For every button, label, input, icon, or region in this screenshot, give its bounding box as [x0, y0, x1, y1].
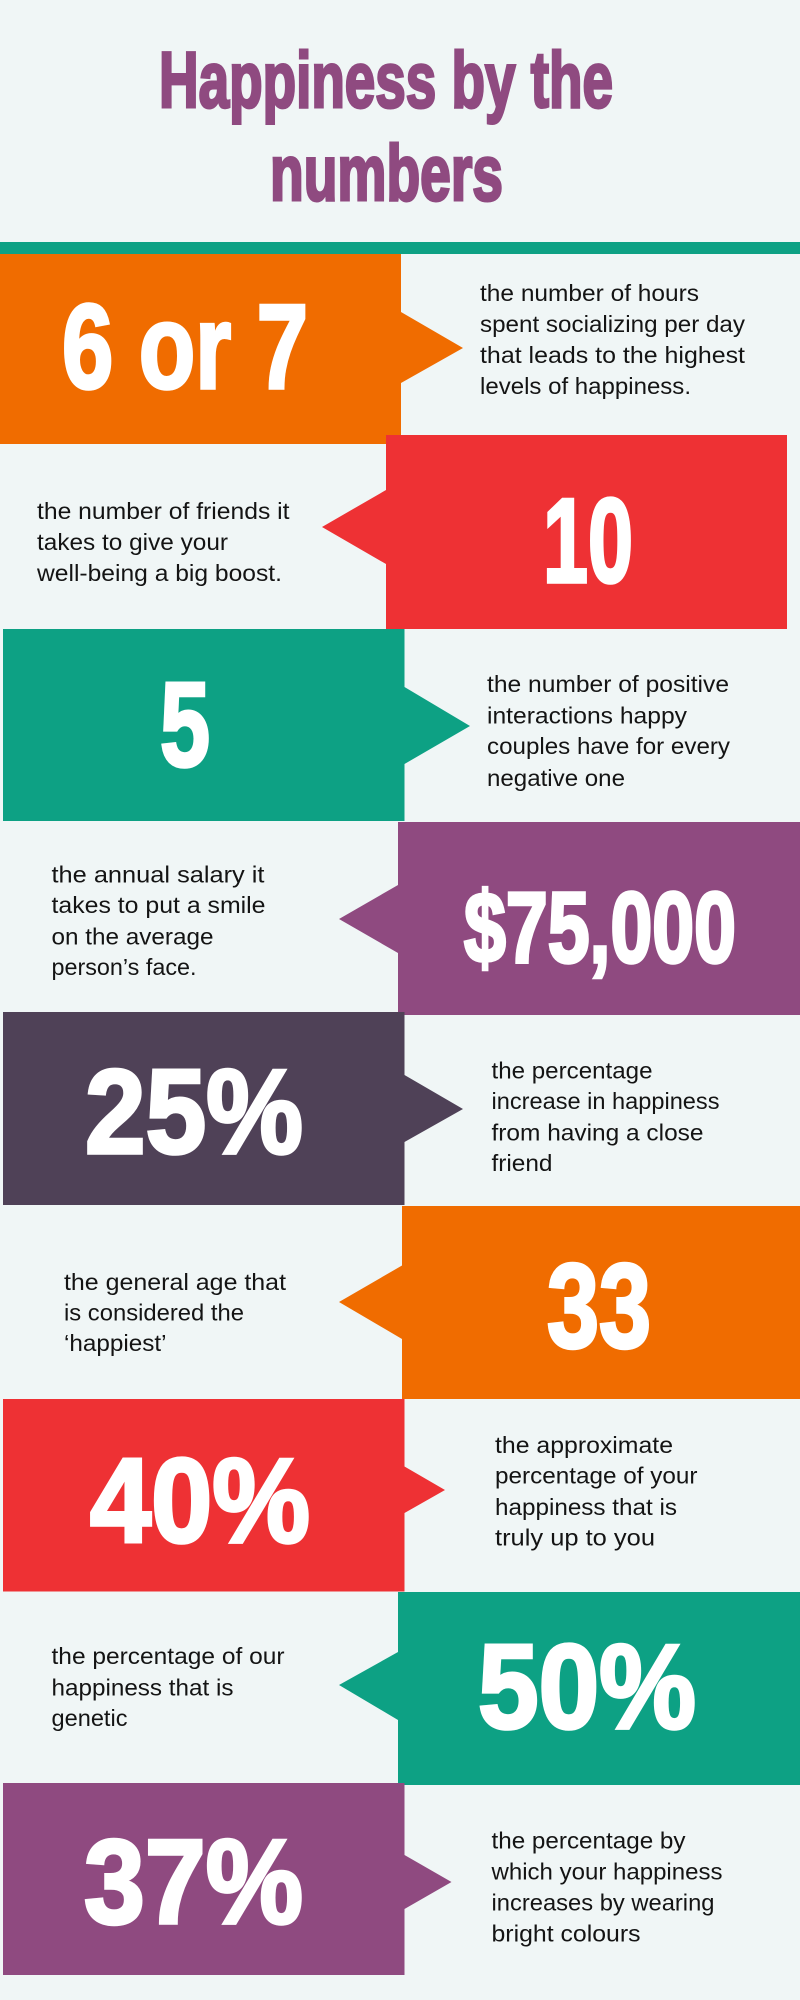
orange arrow banner — [339, 1206, 800, 1399]
description: bright colours — [490, 1828, 722, 1946]
description: happiest age: ‘happiest’ — [64, 1330, 166, 1356]
description: up to you: percentage of your — [495, 1462, 698, 1488]
description: hours socializing — [480, 280, 746, 399]
orange arrow banner — [0, 254, 463, 444]
description: positive interactions: negative one — [487, 765, 625, 791]
panel: $75,000 — [52, 822, 800, 1015]
description: friends: the number of friends it — [37, 498, 290, 524]
description: annual salary — [52, 862, 266, 980]
description: annual salary: the annual salary it — [52, 862, 265, 888]
teal arrow banner — [339, 1592, 800, 1785]
description: close friend: increase in happiness — [492, 1088, 720, 1114]
panel: 40% — [3, 1399, 698, 1592]
description: bright colours: increases by wearing — [492, 1890, 714, 1916]
description: up to you — [495, 1432, 698, 1550]
purple arrow banner — [3, 1783, 452, 1975]
number: 5: 5 — [160, 658, 210, 792]
description: annual salary: person’s face. — [52, 954, 196, 980]
description: close friend: from having a close — [492, 1120, 704, 1146]
title — [159, 35, 613, 217]
panel: 37% — [3, 1783, 722, 1975]
panel: 25% — [3, 1012, 720, 1205]
description: genetic: genetic — [52, 1705, 128, 1731]
description: positive interactions: interactions happy — [487, 702, 688, 728]
description: hours socializing: that leads to the highest — [480, 342, 746, 368]
description: genetic: the percentage of our — [52, 1643, 285, 1669]
description: bright colours: which your happiness — [490, 1858, 722, 1884]
description: close friend — [492, 1058, 720, 1176]
red arrow banner — [3, 1399, 445, 1592]
description: bright colours: the percentage by — [492, 1828, 686, 1854]
description: happiest age — [64, 1269, 287, 1356]
description: close friend: friend — [492, 1150, 552, 1176]
dark plum arrow banner — [3, 1012, 463, 1205]
description: genetic — [52, 1643, 285, 1731]
panel: 10 — [36, 435, 787, 629]
number: 33: 33 — [547, 1239, 651, 1373]
number: 40%: 40% — [90, 1434, 310, 1568]
description: up to you: happiness that is — [495, 1494, 677, 1520]
description: close friend: the percentage — [492, 1058, 652, 1084]
number: 37%: 37% — [84, 1815, 303, 1949]
description: hours socializing: the number of hours — [480, 280, 699, 306]
description: annual salary: takes to put a smile — [52, 892, 266, 918]
purple arrow banner — [339, 822, 800, 1015]
title: numbers — [270, 128, 503, 217]
description: friends: well-being a big boost. — [36, 560, 282, 586]
description: friends — [36, 498, 290, 586]
description: hours socializing: levels of happiness. — [480, 373, 691, 399]
title: Happiness by the — [159, 35, 613, 124]
description: annual salary: on the average — [52, 924, 214, 950]
description: friends: takes to give your — [37, 529, 228, 555]
description: genetic: happiness that is — [52, 1674, 233, 1700]
description: bright colours: bright colours — [492, 1920, 640, 1946]
number: 6 or 7: 6 or 7 — [62, 280, 308, 414]
number: 50%: 50% — [478, 1620, 696, 1754]
number: 25%: 25% — [85, 1045, 303, 1179]
teal header divider — [0, 242, 800, 254]
teal arrow banner — [3, 629, 470, 821]
description: happiest age: is considered the — [64, 1300, 244, 1326]
description: hours socializing: spent socializing per day — [480, 311, 746, 337]
number: 10: 10 — [543, 474, 633, 608]
panel: 50% — [52, 1592, 800, 1785]
description: positive interactions — [487, 671, 731, 791]
description: positive interactions: couples have for every — [487, 733, 731, 759]
panel: 33 — [64, 1206, 800, 1399]
description: positive interactions: the number of positive — [487, 671, 729, 697]
description: up to you: the approximate — [495, 1432, 673, 1458]
description: up to you: truly up to you — [495, 1524, 655, 1550]
panel: 6 or 7 — [0, 254, 746, 444]
description: happiest age: the general age that — [64, 1269, 287, 1295]
red arrow banner — [322, 435, 787, 629]
panel: 5 — [3, 629, 731, 821]
